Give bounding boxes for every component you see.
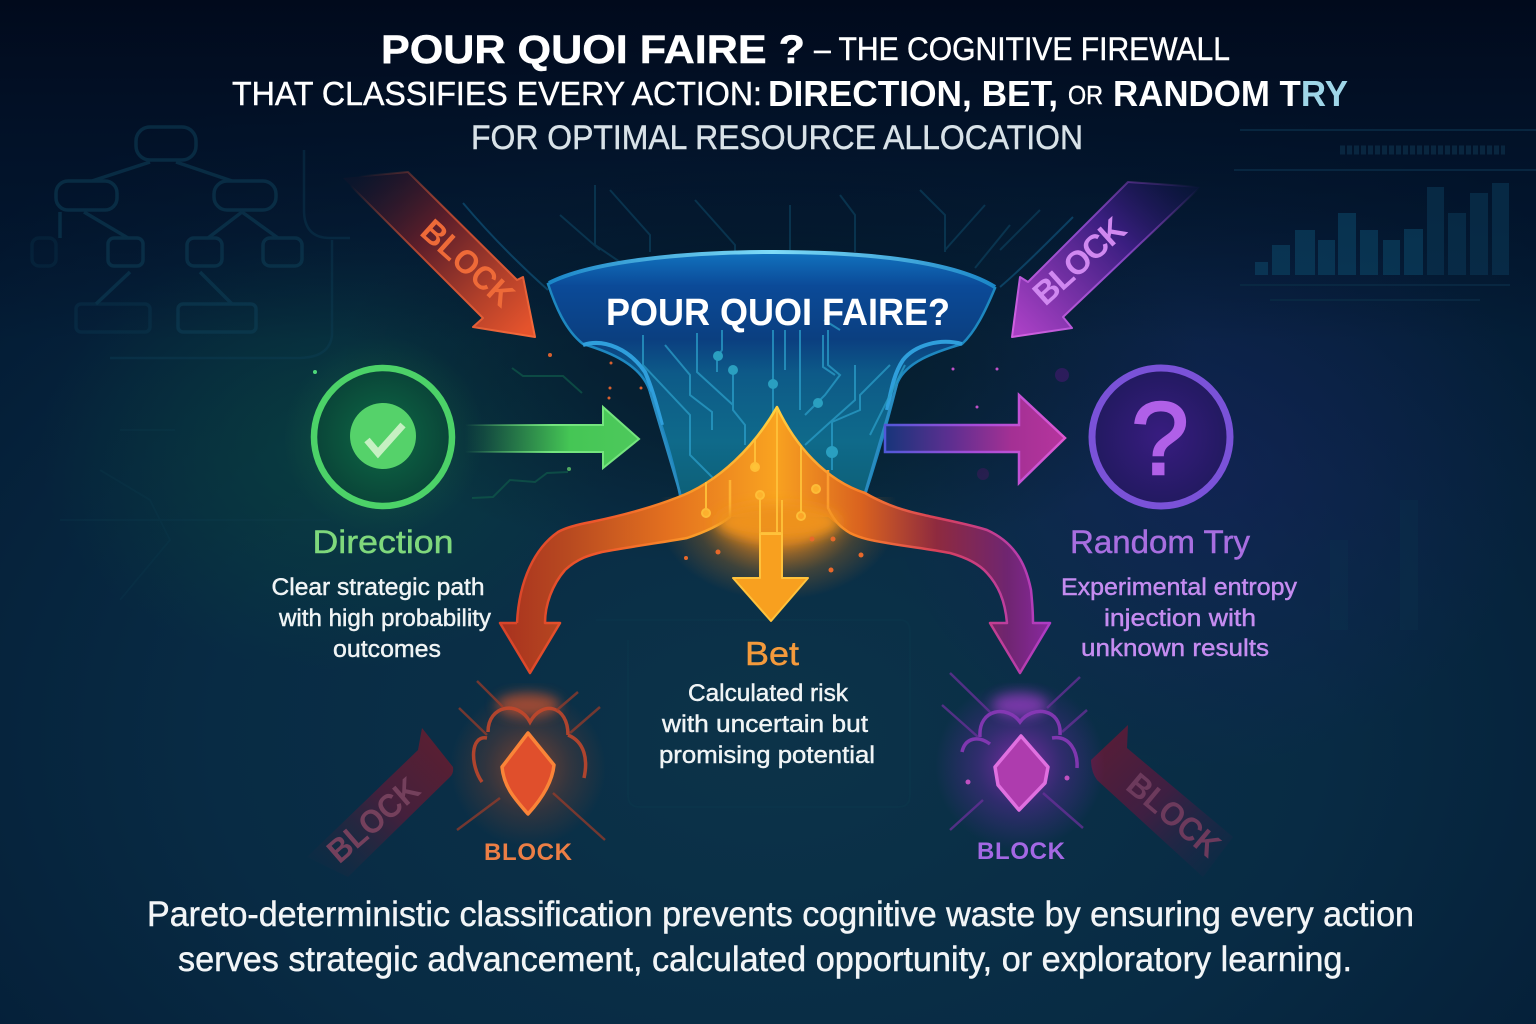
- bottom summary: [147, 895, 1414, 979]
- random try indicator: [1092, 368, 1230, 506]
- block label purple: BLOCK: [977, 838, 1066, 865]
- random try text: Experimental entropy: [1061, 574, 1297, 601]
- direction indicator: [284, 337, 484, 537]
- title: POUR QUOI FAIRE ?: [381, 28, 805, 72]
- title: [232, 28, 1348, 157]
- funnel label: POUR QUOI FAIRE?: [606, 292, 950, 334]
- funnel nodes: [713, 351, 838, 458]
- funnel lip: [583, 342, 962, 493]
- random try text: Random Try: [1070, 524, 1250, 560]
- bet text: promising potential: [659, 742, 875, 769]
- arrow: faded lower-left BLOCK: BLOCK: [320, 770, 427, 870]
- random try text: [1061, 524, 1297, 662]
- bet text: Calculated risk: [688, 680, 849, 707]
- bet text: [659, 635, 875, 769]
- arrow: green to funnel: [465, 407, 639, 468]
- title: THAT CLASSIFIES EVERY ACTION:: [232, 75, 762, 112]
- title: DIRECTION, BET,: [768, 73, 1058, 114]
- title: FOR OPTIMAL RESOURCE ALLOCATION: [471, 119, 1083, 157]
- lower fill blend: [716, 504, 840, 540]
- title: – THE COGNITIVE FIREWALL: [814, 31, 1230, 67]
- random try text: injection with: [1104, 605, 1256, 632]
- direction text: Clear strategic path: [272, 574, 484, 601]
- icon: check mark: [367, 425, 403, 453]
- split body: [500, 407, 1050, 673]
- direction text: [272, 524, 491, 663]
- body fade: [666, 497, 891, 595]
- bet text: Bet: [745, 635, 799, 672]
- funnel: [548, 252, 995, 495]
- background circuit lines above funnel: [463, 185, 1073, 290]
- direction text: Direction: [312, 524, 454, 560]
- bet text: with uncertain but: [661, 711, 868, 738]
- sparks: [684, 536, 864, 572]
- icon: orange shield block: [450, 681, 606, 846]
- funnel circuit lines: [643, 320, 905, 490]
- arrow: faded lower-right BLOCK: BLOCK: [1120, 765, 1228, 864]
- title: RANDOM TRY: [1113, 73, 1348, 114]
- icon: check disk: [350, 403, 416, 469]
- arrow: funnel to random try: [885, 395, 1065, 483]
- icon: purple ring: [1092, 368, 1230, 506]
- split edges: [500, 407, 1050, 673]
- centre arrow: [733, 534, 808, 621]
- arrow: faded lower-left BLOCK: [307, 728, 453, 877]
- orange circuit traces: [702, 410, 820, 534]
- bottom summary: Pareto-deterministic classification prevents cognitive waste by ensuring every action: [147, 895, 1414, 934]
- arrow: faded lower-right BLOCK: [1091, 725, 1233, 877]
- icon: question mark: ?: [1131, 381, 1189, 496]
- direction text: outcomes: [333, 636, 441, 663]
- background bar chart: [1234, 130, 1536, 300]
- arrow: split orange flows: [500, 407, 1050, 673]
- arrow: top-right purple BLOCK: BLOCK: [1025, 210, 1133, 312]
- random try text: unknown results: [1081, 635, 1269, 662]
- icon: purple shield block: [935, 673, 1105, 850]
- faint green traces and sparks: [313, 353, 1069, 498]
- arrow: top-left red BLOCK: [343, 172, 535, 337]
- direction text: with high probability: [278, 605, 491, 632]
- icon: green ring: [314, 368, 452, 506]
- bottom summary: serves strategic advancement, calculated opportunity, or exploratory learning.: [178, 940, 1352, 979]
- arrow: top-right purple BLOCK: [1012, 182, 1200, 337]
- background faint panels: [60, 430, 1418, 807]
- title: OR: [1068, 80, 1103, 110]
- block label orange: BLOCK: [484, 839, 573, 866]
- funnel rim highlight: [549, 252, 995, 287]
- background flowchart: [32, 127, 350, 358]
- arrow: top-left red BLOCK: BLOCK: [414, 212, 522, 314]
- funnel body: [548, 252, 995, 495]
